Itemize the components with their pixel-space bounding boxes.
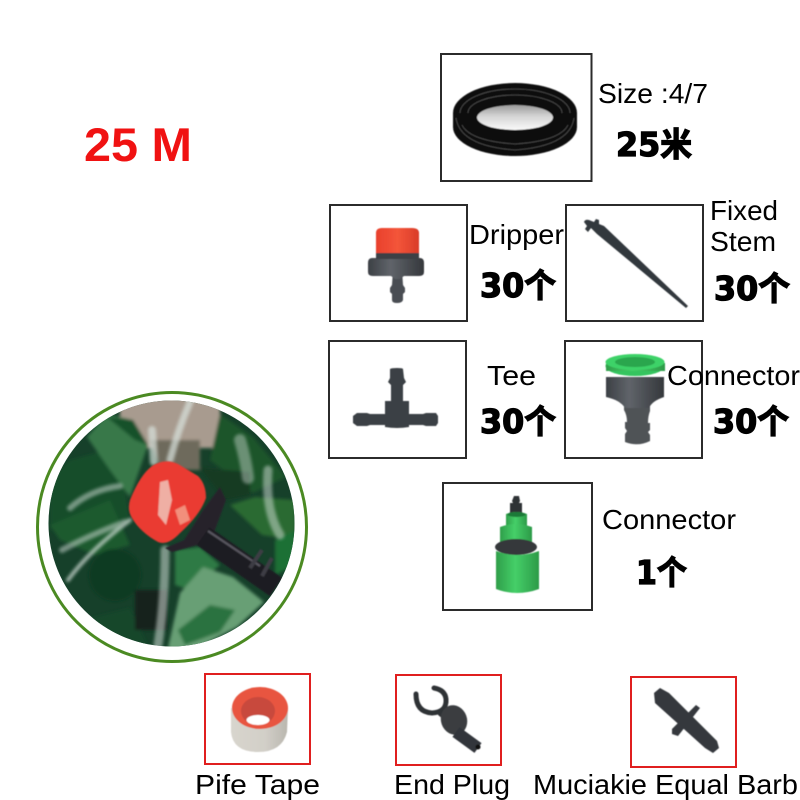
label: dripper: Dripper xyxy=(469,219,564,250)
icon: dripper xyxy=(368,228,424,303)
panel: dripper xyxy=(330,205,467,321)
photo: dripper spraying water on plant leaves xyxy=(38,392,306,662)
label: connector bottom: Connector xyxy=(602,504,736,535)
label: fixed stem: Fixed xyxy=(710,195,778,226)
quantity: fixed stem: 30个 xyxy=(714,269,790,308)
icon: tubing coil xyxy=(453,83,577,156)
quantity: dripper: 30个 xyxy=(480,266,556,305)
icon: tap connector xyxy=(606,354,665,444)
icon: hose connector xyxy=(495,496,539,593)
icon: end plug xyxy=(416,688,480,750)
label: fixed stem: Stem xyxy=(710,226,776,257)
label: connector top: Connector xyxy=(667,360,800,391)
dripper stem xyxy=(165,487,276,587)
photo scene xyxy=(48,400,294,646)
icon: tee fitting xyxy=(353,368,438,428)
label: pipe tape: Pife Tape xyxy=(195,769,320,800)
panel: end plug xyxy=(396,675,501,765)
panel: equal barb xyxy=(631,677,736,767)
panel: pipe tape xyxy=(205,674,310,764)
quantity: tee: 30个 xyxy=(480,402,556,441)
panel: fixed stem xyxy=(566,205,703,321)
quantity: 25 meters: 25米 xyxy=(616,125,692,164)
panel: tubing coil xyxy=(441,54,592,181)
label: fixed stem xyxy=(710,195,778,257)
quantity: hose connector: 1个 xyxy=(636,553,687,592)
panel: tap connector xyxy=(565,341,702,458)
photo ring xyxy=(38,392,306,662)
label: size: Size :4/7 xyxy=(598,78,708,109)
label: equal barb: Muciakie Equal Barb xyxy=(533,769,798,800)
title: 25 M: 25 M xyxy=(84,118,192,171)
icon: tape roll xyxy=(231,687,288,752)
water jets xyxy=(62,402,280,645)
panel: hose connector xyxy=(443,483,592,610)
label: tee: Tee xyxy=(487,360,536,391)
icon: fixed stem stake xyxy=(584,219,688,308)
icon: equal barb xyxy=(654,688,719,753)
dripper red head xyxy=(129,461,206,543)
panel: tee xyxy=(329,341,466,458)
quantity: tap connector: 30个 xyxy=(713,402,789,441)
label: end plug: End Plug xyxy=(394,769,510,800)
